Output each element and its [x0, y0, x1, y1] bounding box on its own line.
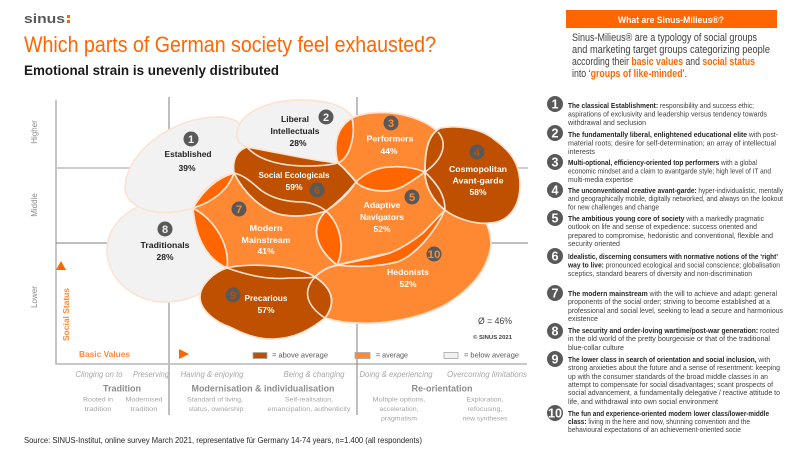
blob: Adaptive Navigators: [317, 167, 445, 265]
item 5: outlook on life and sense of expedience: success oriented and: [568, 222, 757, 231]
item 9: [547, 351, 780, 406]
item 9: strong anxieties about the future and a sense of resentment: keeping: [568, 363, 780, 372]
value descriptions: Rooted in: [83, 396, 113, 404]
item 1: withdrawal and seclusion: [567, 118, 646, 127]
item 6: [547, 248, 780, 278]
label: 6 Social Ecologicals: 59%: [286, 182, 303, 192]
label: 3 Performers: [366, 116, 414, 156]
label: 2 Liberal Intellectuals: [270, 110, 334, 148]
item 8: blue-collar culture: [568, 343, 624, 352]
blob: Precarious: [200, 265, 332, 339]
basic value orientations: Having & enjoying: [180, 370, 244, 379]
axis labels: social status levels: Middle: [30, 193, 39, 217]
label: 1 Established: Established: [164, 149, 212, 159]
label: 3 Performers: Performers: [366, 134, 414, 144]
label: 8 Traditionals: [140, 222, 190, 262]
overlap lenses: [193, 118, 445, 268]
item 8: in the old world of the pretty bourgeoisie or that of the traditional: [568, 334, 770, 343]
value descriptions: tradition: [84, 406, 112, 413]
item 4: 4: [552, 184, 559, 198]
item 7: professional and social level, seeking to lead a secure and harmonious: [568, 306, 783, 315]
source note: Source: SINUS-Institut, online survey March 2021, representative für Germany 14-74 years, n=1.400 (all respondents): [24, 436, 422, 445]
average value: Ø = 46%: [478, 316, 512, 326]
item 7: proponents of the social order; striving to become established at a: [568, 297, 770, 306]
item 6: 6: [552, 250, 559, 264]
legend: = below average: [464, 350, 519, 360]
value descriptions: acceleration,: [380, 406, 419, 413]
item 6: sceptics, standard bearers of diversity and non-discrimination: [568, 269, 752, 278]
panel: milieu descriptions: [547, 96, 783, 434]
value descriptions: Self-realisation,: [285, 396, 333, 404]
panel header: What are Sinus-Milieus®?: [618, 15, 724, 26]
item 2: material roots; desire for self-determination; an array of intellectual: [568, 138, 776, 148]
item 2: The fundamentally liberal, enlightened educational elite with post-: [568, 130, 779, 139]
label: 10 Hedonists: Hedonists: [387, 267, 429, 277]
item 2: [547, 125, 779, 156]
item 1: 1: [552, 98, 559, 112]
item 4: for new challenges and change: [568, 202, 659, 212]
item 3: [547, 154, 771, 184]
item 5: security oriented: [568, 239, 620, 248]
item 1: The classical Establishment: responsibility and success ethic;: [568, 101, 754, 110]
item 2: interests: [568, 147, 595, 156]
blob: Performers: [336, 113, 443, 191]
value headings: [103, 384, 473, 394]
item 5: 5: [552, 212, 559, 226]
value descriptions: status, ownership: [188, 406, 244, 413]
label: 9 Precarious: 57%: [258, 305, 275, 315]
label: 4 Cosmopolitan Avant-garde: Cosmopolitan: [449, 164, 507, 174]
item 9: life, and withdrawal into own social environment: [568, 397, 718, 406]
item 4: The unconventional creative avant-garde: hyper-individualistic, mentally: [568, 186, 783, 195]
item 5: prepared to compromise, hedonistic and conventional, flexible and: [568, 231, 773, 240]
intro text: [572, 32, 770, 80]
label: 2 Liberal Intellectuals: Liberal: [281, 114, 309, 124]
label: 8 Traditionals: Traditionals: [140, 240, 190, 250]
label: 10 Hedonists: [387, 246, 442, 289]
panel header: [566, 10, 777, 28]
item 9: up with the consumer standards of the broad middle classes in an: [568, 372, 768, 381]
intro text: and marketing target groups categorizing people: [572, 44, 770, 56]
item 3: Multi-optional, efficiency-oriented top performers with a global: [568, 158, 757, 167]
item 9: 9: [552, 352, 559, 366]
blob: Established: [125, 117, 248, 212]
item 8: 8: [552, 324, 559, 338]
basic value orientations: [76, 370, 527, 379]
logo: sinus: sinus: [24, 12, 65, 26]
item 10: The fun and experience-oriented modern lower class/lower-middle: [568, 409, 769, 418]
label: 10 Hedonists: 52%: [400, 279, 417, 289]
label: 4 Cosmopolitan Avant-garde: [449, 144, 507, 197]
label: 6 Social Ecologicals: [258, 170, 330, 198]
label: 7 Modern Mainstream: Modern: [250, 223, 282, 233]
title: Which parts of German society feel exhausted?: [24, 32, 436, 57]
blob: Liberal Intellectuals: [237, 100, 353, 163]
label: 6 Social Ecologicals: Social Ecologicals: [258, 170, 330, 180]
legend: = above average: [272, 350, 328, 360]
basic value orientations: Doing & experiencing: [360, 370, 433, 379]
value descriptions: tradition: [130, 406, 158, 413]
item 3: multi-media expertise: [568, 175, 633, 184]
axis labels: social status levels: Higher: [30, 120, 39, 144]
axis title: Social Status with arrow: [56, 261, 71, 341]
label: 9 Precarious: 9: [230, 290, 236, 302]
label: 7 Modern Mainstream: Mainstream: [242, 235, 291, 245]
value descriptions: emancipation, authenticity: [268, 406, 351, 413]
label: 2 Liberal Intellectuals: 2: [323, 112, 329, 124]
label: 8 Traditionals: 8: [162, 224, 168, 236]
axis title: Basic Values with arrow: [79, 349, 189, 359]
label: 1 Established: 39%: [178, 163, 196, 173]
value descriptions: Multiple options,: [372, 396, 426, 404]
item 7: 7: [552, 286, 559, 300]
chart axes and grid: [56, 97, 528, 415]
label: 4 Cosmopolitan Avant-garde: Avant-garde: [452, 176, 504, 186]
item 6: way to live: pronounced ecological and social conscience; globalisation: [567, 260, 780, 270]
blob: Modern Mainstream: [193, 173, 337, 279]
label: 1 Established: [164, 132, 212, 173]
label: 5 Adaptive Navigators: 5: [409, 192, 415, 204]
item 3: 3: [552, 156, 559, 170]
item 9: The lower class in search of orientation and social inclusion, with: [568, 355, 770, 364]
chart: Sinus-Milieus map: [30, 97, 528, 415]
intro text: Sinus-Milieus® are a typology of social groups: [572, 32, 757, 44]
value descriptions: pragmatism: [381, 416, 417, 422]
copyright: © SINUS 2021: [473, 334, 512, 341]
item 4: [547, 182, 783, 212]
label: 5 Adaptive Navigators: Adaptive: [364, 200, 401, 210]
item 10: [547, 405, 769, 434]
label: 1 Established: 1: [188, 134, 194, 146]
milieu blobs: [107, 100, 520, 339]
item 2: 2: [552, 126, 559, 140]
label: 9 Precarious: [226, 288, 288, 315]
value descriptions: Modernised: [126, 396, 163, 404]
blob: Hedonists: [315, 207, 491, 323]
label: 2 Liberal Intellectuals: 28%: [290, 138, 307, 148]
basic value orientations: Preserving: [133, 370, 170, 379]
value descriptions: new syntheses: [462, 416, 508, 422]
label: 5 Adaptive Navigators: Navigators: [360, 212, 404, 222]
label: 7 Modern Mainstream: 41%: [258, 246, 275, 256]
intro text: into ‘groups of like-minded’.: [572, 68, 687, 80]
label: 9 Precarious: Precarious: [244, 293, 288, 303]
item 10: class: living in the here and now, shunning convention and the: [568, 417, 750, 426]
blob: Cosmopolitan Avant-garde: [425, 127, 520, 223]
item 5: [547, 210, 773, 248]
item 7: [547, 285, 783, 323]
axis title: Social Status with arrow: Social Status: [61, 288, 71, 341]
legend: [253, 350, 519, 360]
blob: Traditionals: [107, 201, 227, 302]
axis labels: social status levels: [30, 120, 39, 308]
label: 10 Hedonists: 10: [428, 249, 440, 261]
basic value orientations: Overcoming limitations: [447, 370, 527, 379]
value headings: Modernisation & individualisation: [192, 384, 335, 394]
label: 3 Performers: 3: [388, 118, 394, 130]
label: 4 Cosmopolitan Avant-garde: 4: [474, 147, 481, 159]
label: 6 Social Ecologicals: 6: [314, 185, 320, 197]
label: 3 Performers: 44%: [380, 146, 398, 156]
value descriptions: Exploration,: [466, 396, 504, 404]
item 1: [547, 96, 767, 127]
label: 7 Modern Mainstream: 7: [236, 204, 242, 216]
intro text: according their basic values and social status: [572, 56, 755, 68]
axis labels: social status levels: Lower: [30, 286, 39, 308]
item 1: aspirations of exclusivity and leadership versus tendency towards: [568, 110, 767, 118]
item 7: The modern mainstream with the will to achieve and adapt: general: [568, 289, 777, 298]
item 10: 10: [548, 406, 562, 420]
label: 2 Liberal Intellectuals: Intellectuals: [270, 126, 320, 136]
item 8: The security and order-loving wartime/post-war generation: rooted: [568, 326, 779, 335]
label: 7 Modern Mainstream: [232, 202, 291, 256]
basic values axis: categories below chart: [76, 370, 527, 422]
label: 5 Adaptive Navigators: 52%: [374, 224, 391, 234]
item 4: and geographically mobile, digitally networked, and always on the lookout: [568, 194, 783, 203]
label: 4 Cosmopolitan Avant-garde: 58%: [470, 187, 487, 197]
value descriptions: [83, 396, 508, 422]
basic value orientations: Being & changing: [284, 370, 345, 379]
label: 8 Traditionals: 28%: [156, 252, 174, 262]
item 7: existence: [568, 314, 598, 323]
item 9: social advancement, a fundamentally delegative / reactive attitude to: [568, 388, 780, 397]
value headings: Tradition: [103, 384, 141, 394]
label: 5 Adaptive Navigators: [360, 190, 420, 234]
item 3: economic mindset and a claim to avantgarde style; high level of IT and: [568, 166, 771, 176]
value headings: Re-orientation: [412, 384, 473, 394]
value descriptions: refocusing,: [468, 406, 503, 413]
item 10: behavioural expectations of an achievement-oriented socie: [568, 425, 741, 434]
item 9: attempt to compensate for social disadvantages; scant prospects of: [568, 380, 773, 389]
blob: Social Ecologicals: [234, 147, 356, 216]
axis title: Basic Values with arrow: Basic Values: [79, 349, 130, 359]
item 5: The ambitious young core of society with a markedly pragmatic: [568, 214, 764, 223]
item 8: [547, 323, 779, 352]
legend: = average: [376, 350, 408, 360]
item 6: Idealistic, discerning consumers with normative notions of the ‘right’: [568, 252, 778, 261]
subtitle: Emotional strain is unevenly distributed: [24, 63, 279, 78]
basic value orientations: Clinging on to: [76, 370, 123, 379]
value descriptions: Standard of living,: [187, 396, 243, 404]
panel: what are Sinus-Milieus: [566, 10, 777, 80]
overlap outlines: [227, 128, 443, 318]
